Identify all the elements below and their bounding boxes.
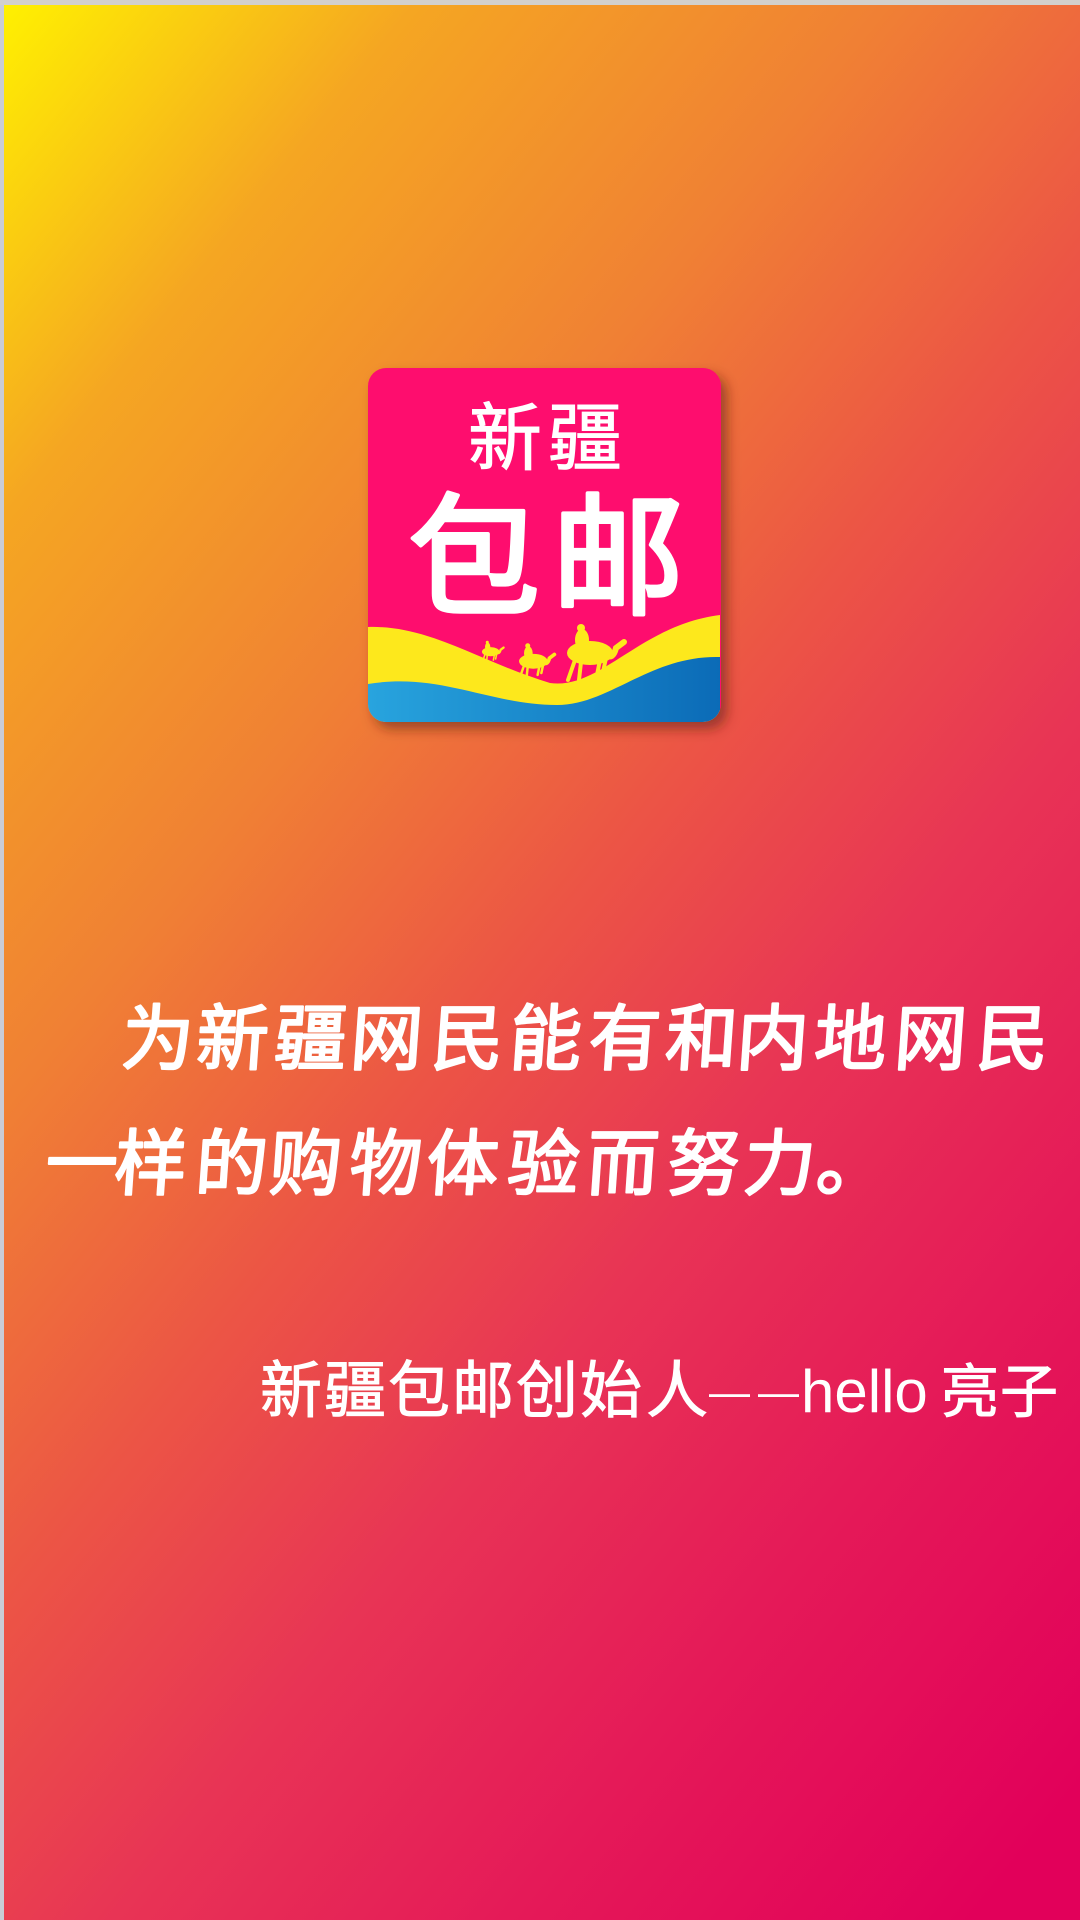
logo title: 新疆: 新疆 [468, 397, 622, 480]
founder signature: hello [801, 1358, 928, 1425]
logo waves [368, 615, 720, 722]
slogan line 1: 为新疆网民能有和内地网民 [119, 1000, 1051, 1080]
founder signature: 亮子 [941, 1360, 1058, 1425]
camel rider large [567, 624, 624, 680]
logo tile [368, 368, 721, 722]
founder signature: — [709, 1369, 750, 1415]
camel rider medium [519, 643, 554, 678]
slogan line 2: 一样的购物体验而努力。 [43, 1125, 891, 1205]
founder signature: 新疆包邮创始人 [260, 1357, 708, 1426]
app logo [368, 368, 721, 722]
icon: camel caravan [482, 624, 624, 680]
founder signature [260, 1357, 1058, 1426]
founder signature: — [758, 1369, 799, 1415]
page artwork [48, 368, 1056, 1418]
camel rider small [482, 641, 504, 662]
logo title: 包邮: 包邮 [408, 485, 684, 632]
